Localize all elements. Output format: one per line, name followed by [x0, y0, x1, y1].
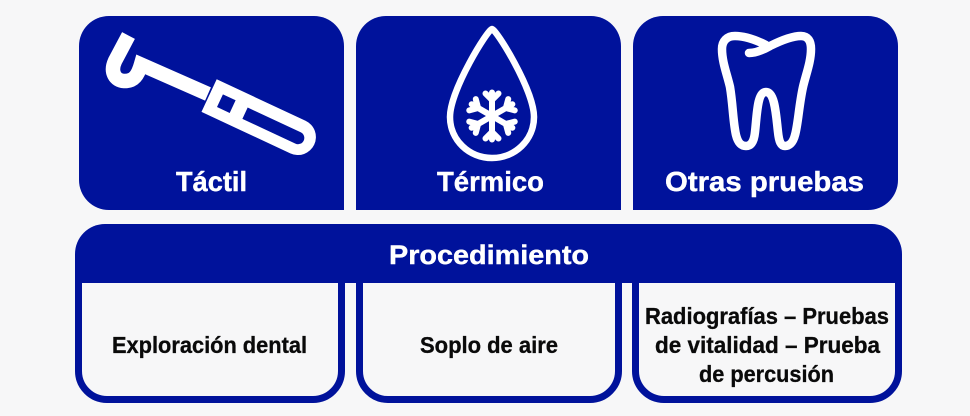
icon: snowflake: [468, 92, 516, 140]
text: Radiografías – Pruebas de vitalidad – Prueba de percusión: de percusión: [699, 361, 834, 387]
icon: tooth: [722, 36, 811, 146]
panel: Térmico: [356, 16, 621, 210]
panel: Procedimiento table: [75, 224, 902, 400]
label: Táctil: Táctil: [176, 166, 247, 197]
icon: dental probe: [113, 36, 322, 161]
label: Otras pruebas: Otras pruebas: [665, 166, 864, 197]
panel: Táctil: [79, 16, 344, 210]
icon: water drop with snowflake: [450, 29, 534, 158]
box: Soplo de aire: [360, 270, 618, 400]
text: Soplo de aire: Soplo de aire: [420, 332, 558, 358]
label: Térmico: Térmico: [437, 166, 544, 197]
box: Exploración dental: [78, 270, 342, 400]
box: Radiografías, pruebas de vitalidad y percusión: [636, 270, 898, 400]
panel: Otras pruebas: [633, 16, 898, 210]
header: Procedimiento: [75, 224, 902, 283]
text: Radiografías – Pruebas de vitalidad – Prueba de percusión: [645, 303, 889, 387]
text: Radiografías – Pruebas de vitalidad – Prueba de percusión: de vitalidad – Prueba: [655, 332, 880, 358]
text: Radiografías – Pruebas de vitalidad – Prueba de percusión: Radiografías – Pruebas: [645, 303, 889, 329]
heading text: Procedimiento: Procedimiento: [389, 240, 589, 270]
text: Exploración dental: Exploración dental: [112, 332, 307, 358]
